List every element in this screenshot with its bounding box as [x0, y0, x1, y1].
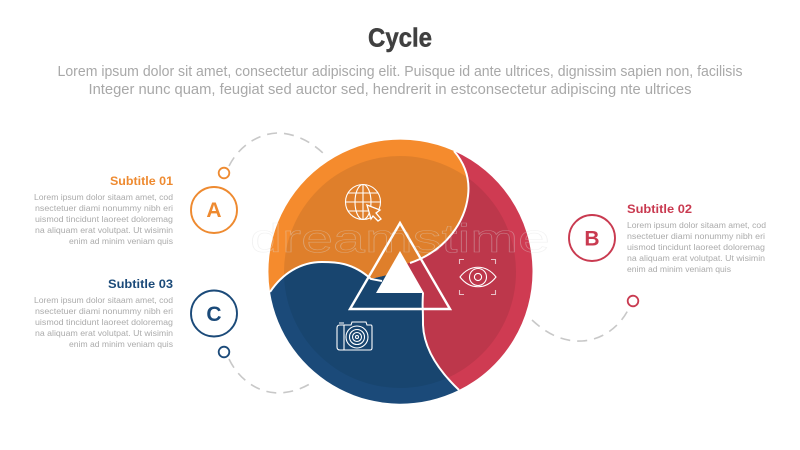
segment: blue: [270, 262, 459, 404]
body text C: na aliquam erat volutpat. Ut wisimin: [35, 328, 173, 338]
title: Cycle: [368, 24, 432, 52]
body text B: [627, 220, 766, 274]
body text A: Lorem ipsum dolor sitaam amet, cod: [34, 192, 173, 202]
badge A: [191, 187, 237, 233]
panel: item B: [569, 204, 766, 306]
intro text: Integer nunc quam, feugiat sed auctor sed, hendrerit in estconsectetur adipiscing nte ultrices: [88, 82, 691, 98]
icon: eye with focus frame: [460, 260, 496, 294]
panel: item A: [34, 168, 237, 246]
segment: red: [400, 151, 532, 390]
intro text: Lorem ipsum dolor sit amet, consectetur adipiscing elit. Puisque id ante ultrices, dignissim sapien non, facilisis: [58, 64, 742, 80]
watermark: dreamstime: [250, 217, 550, 261]
dashed connector B: [532, 308, 629, 341]
subtitle 03: Subtitle 03: [108, 279, 173, 291]
segment dividers: [270, 151, 468, 390]
connector dot A: [219, 168, 229, 178]
badge C: [191, 290, 237, 336]
connector dot B: [628, 296, 638, 306]
segment: orange: [268, 140, 468, 292]
body text C: nsectetuer diami nonummy nibh eri: [35, 306, 173, 316]
body text B: na aliquam erat volutpat. Ut wisimin: [627, 253, 765, 263]
body text C: [34, 295, 173, 349]
panel: item C: [34, 279, 237, 357]
badge C: C: [206, 303, 222, 326]
body text C: Lorem ipsum dolor sitaam amet, cod: [34, 295, 173, 305]
icon: globe with cursor: [346, 184, 381, 221]
badge B: [569, 215, 615, 261]
body text B: Lorem ipsum dolor sitaam amet, cod: [627, 220, 766, 230]
triangle outline: [350, 223, 450, 309]
centre white triangle: [376, 251, 424, 293]
body text A: nsectetuer diami nonummy nibh eri: [35, 203, 173, 213]
subtitle 01: Subtitle 01: [110, 176, 174, 188]
cycle diagram: [268, 140, 532, 404]
body text A: enim ad minim veniam quis: [69, 236, 173, 246]
subtitle 02: Subtitle 02: [627, 204, 692, 216]
intro text: [58, 64, 742, 98]
body text A: [34, 192, 173, 246]
body text B: uismod tincidunt laoreet doloremag: [627, 242, 765, 252]
body text B: enim ad minim veniam quis: [627, 264, 731, 274]
body text B: nsectetuer diami nonummy nibh eri: [627, 231, 765, 241]
badge B: B: [584, 228, 600, 250]
body text A: uismod tincidunt laoreet doloremag: [35, 214, 173, 224]
dashed connector C: [229, 359, 313, 393]
body text C: enim ad minim veniam quis: [69, 339, 173, 349]
icon: camera: [337, 322, 372, 350]
connector dot C: [219, 347, 229, 357]
badge A: A: [206, 199, 222, 222]
dashed connector A: [229, 133, 325, 166]
body text C: uismod tincidunt laoreet doloremag: [35, 317, 173, 327]
body text A: na aliquam erat volutpat. Ut wisimin: [35, 225, 173, 235]
